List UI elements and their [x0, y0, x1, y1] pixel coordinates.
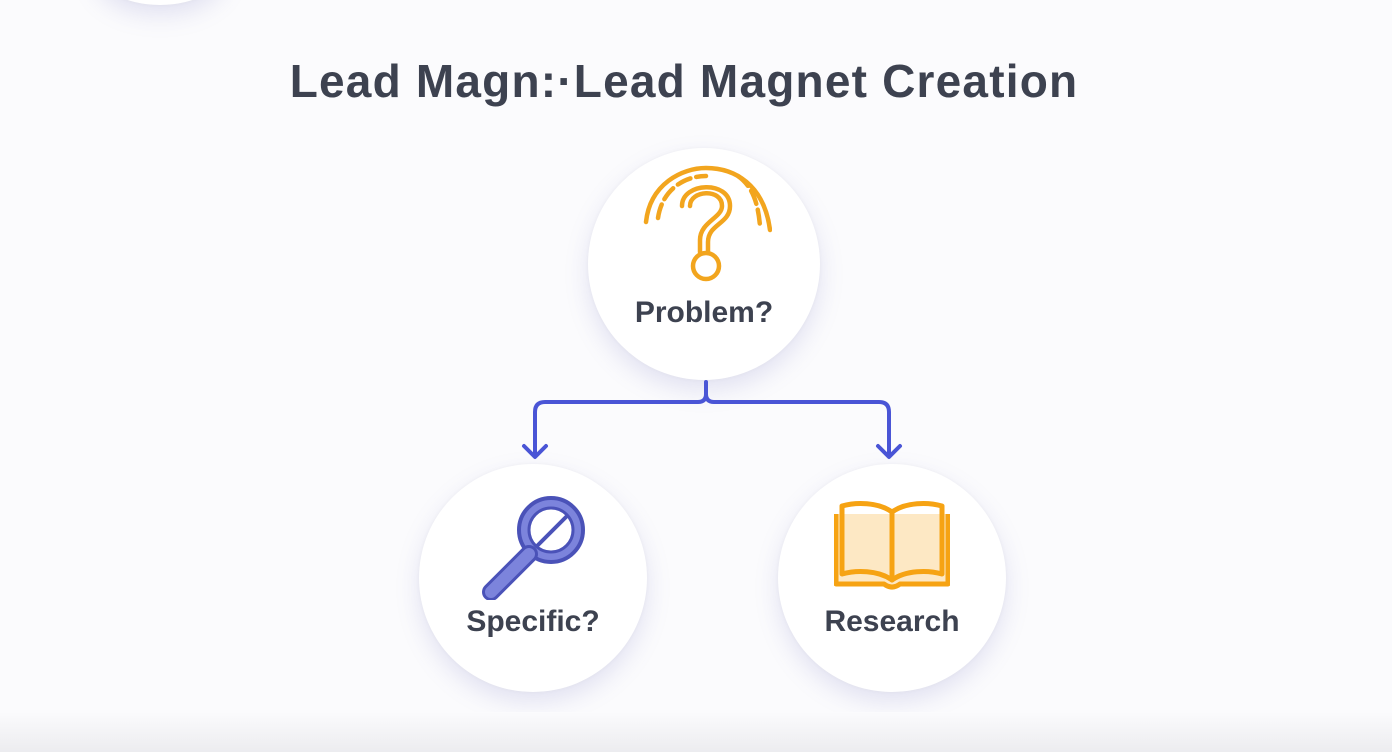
- label: Research: Research: [824, 605, 960, 638]
- node: Problem?: [588, 148, 820, 380]
- icon: open book: [834, 501, 950, 590]
- label: Specific?: Specific?: [466, 605, 600, 638]
- decorative top-left circle: [95, 0, 225, 5]
- label: Problem?: Problem?: [635, 296, 773, 329]
- title: Lead Magn:·Lead Magnet Creation: [290, 55, 1078, 107]
- bottom strip: [0, 712, 1392, 752]
- icon: question mark: [644, 166, 772, 282]
- icon: magnifying glass: [482, 496, 585, 600]
- node: Specific?: [419, 464, 647, 692]
- node: Research: [778, 464, 1006, 692]
